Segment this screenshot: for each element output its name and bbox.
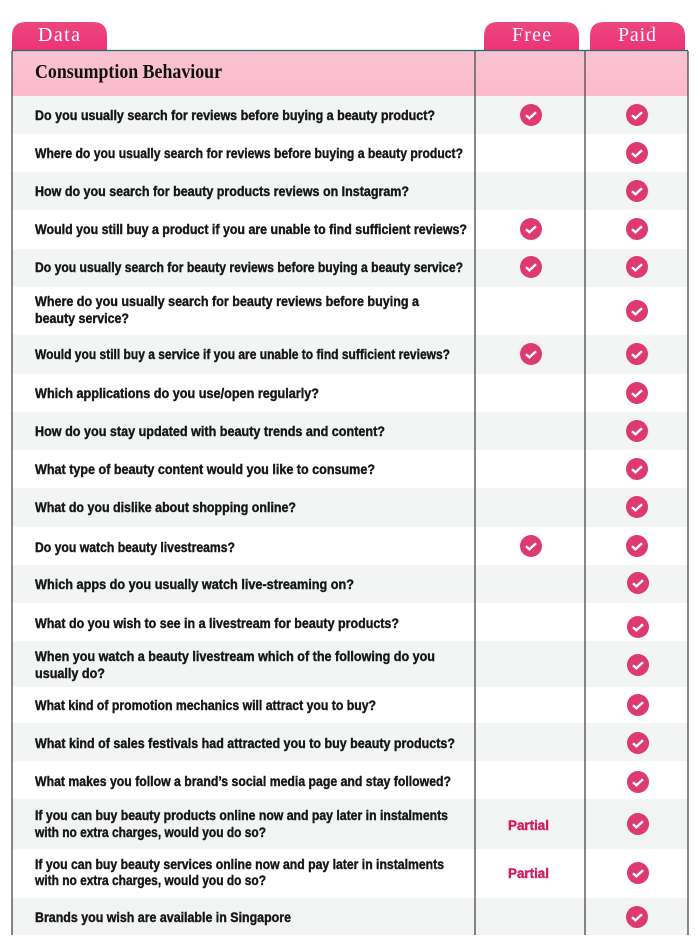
row 19: with no extra charges, would you do so? bbox=[34, 825, 266, 840]
row 1: Do you usually search for reviews before buying a beauty product? bbox=[35, 108, 435, 123]
tab: Paid: Paid bbox=[618, 24, 656, 46]
row 14: What do you wish to see in a livestream for beauty products? bbox=[35, 616, 399, 631]
row 20 bbox=[34, 857, 649, 888]
row 6: Where do you usually search for beauty reviews before buying a bbox=[35, 294, 419, 309]
tab: Free bbox=[484, 22, 579, 50]
row 20: with no extra charges, would you do so? bbox=[34, 873, 266, 888]
row 5: Do you usually search for beauty reviews before buying a beauty service? bbox=[35, 260, 463, 275]
row 3: How do you search for beauty products reviews on Instagram? bbox=[35, 184, 409, 199]
row 9: How do you stay updated with beauty trends and content? bbox=[35, 424, 385, 439]
row 12: Do you watch beauty livestreams? bbox=[35, 540, 235, 555]
row 7: Would you still buy a service if you are unable to find sufficient reviews? bbox=[35, 347, 450, 362]
row 9 bbox=[12, 412, 688, 450]
row 18 bbox=[35, 771, 649, 793]
row 15 bbox=[12, 641, 688, 687]
row 8: Which applications do you use/open regularly? bbox=[35, 386, 319, 401]
row 16 bbox=[35, 694, 649, 716]
row 18: What makes you follow a brand’s social media page and stay followed? bbox=[35, 774, 451, 789]
row 11 bbox=[12, 488, 688, 527]
row 11: What do you dislike about shopping online? bbox=[35, 500, 296, 515]
row 17 bbox=[12, 723, 688, 761]
row 12 bbox=[35, 535, 648, 557]
row 3 bbox=[12, 172, 688, 210]
row 16: What kind of promotion mechanics will attract you to buy? bbox=[35, 698, 376, 713]
row 5 bbox=[12, 249, 688, 287]
row 10 bbox=[35, 458, 648, 480]
row 8 bbox=[35, 382, 648, 404]
row 6 bbox=[35, 294, 648, 326]
tab: Data: Data bbox=[38, 24, 80, 46]
row 4: Would you still buy a product if you are unable to find sufficient reviews? bbox=[35, 222, 467, 237]
row 19: Partial bbox=[508, 818, 549, 833]
row 20: Partial bbox=[508, 866, 549, 881]
row 7 bbox=[12, 335, 688, 374]
row 6: beauty service? bbox=[35, 311, 129, 326]
section header: Consumption Behaviour bbox=[12, 51, 688, 96]
row 15: When you watch a beauty livestream which of the following do you bbox=[35, 649, 435, 664]
tab: Paid bbox=[590, 22, 685, 50]
tab: Data bbox=[12, 22, 107, 50]
row 19: If you can buy beauty products online now and pay later in instalments bbox=[35, 808, 448, 823]
row 15: usually do? bbox=[35, 666, 105, 681]
row 2 bbox=[35, 142, 648, 164]
row 20: If you can buy beauty services online now and pay later in instalments bbox=[35, 857, 444, 872]
row 14 bbox=[35, 616, 649, 638]
row 13: Which apps do you usually watch live-streaming on? bbox=[35, 577, 354, 592]
section header: Consumption Behaviour: Consumption Behaviour bbox=[35, 62, 222, 83]
row 1 bbox=[12, 96, 688, 134]
row 10: What type of beauty content would you like to consume? bbox=[35, 462, 375, 477]
row 21 bbox=[12, 898, 688, 935]
row 2: Where do you usually search for reviews before buying a beauty product? bbox=[35, 146, 463, 161]
row 13 bbox=[12, 565, 688, 603]
row 17: What kind of sales festivals had attracted you to buy beauty products? bbox=[35, 736, 455, 751]
row 19 bbox=[12, 799, 688, 849]
row 4 bbox=[35, 218, 648, 240]
tab: Free: Free bbox=[512, 24, 551, 46]
row 21: Brands you wish are available in Singapore bbox=[35, 910, 291, 925]
